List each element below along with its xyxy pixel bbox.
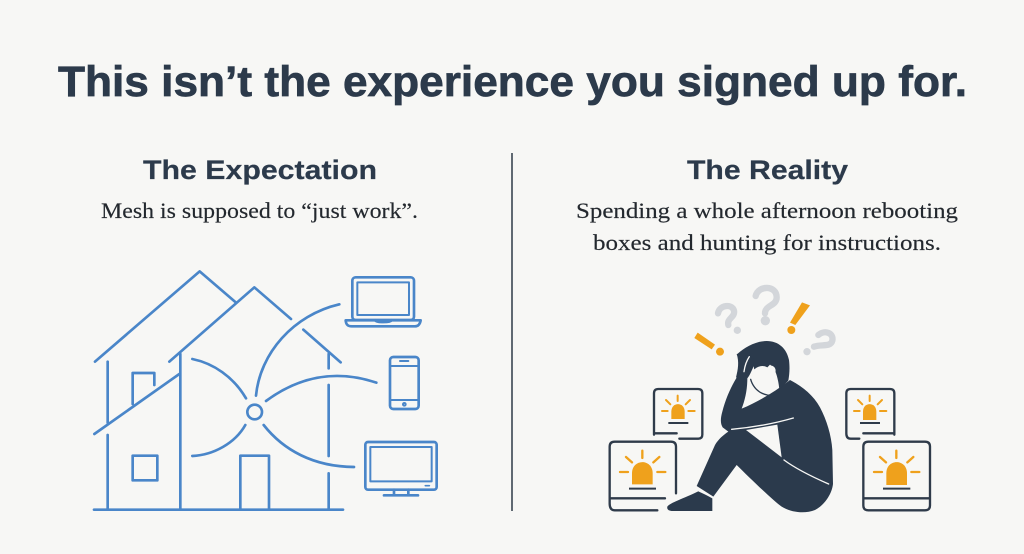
icon: question marks	[718, 288, 833, 355]
shoe	[667, 491, 712, 511]
alert box: back left	[654, 389, 702, 439]
body and legs	[697, 375, 833, 512]
alert box: front right	[863, 442, 930, 510]
heading: the expectation: The Expectation	[143, 155, 377, 185]
text: reality description: Spending a whole afternoon rebooting	[576, 198, 958, 223]
arm and leg highlights	[732, 418, 829, 484]
alert box: front left	[610, 442, 676, 510]
icon: phone	[390, 357, 419, 409]
icon: exclamation marks	[694, 302, 810, 356]
ear	[770, 366, 776, 374]
hand	[736, 353, 754, 380]
text: reality description: boxes and hunting for instructions.	[593, 230, 941, 255]
icon: mesh node with signal curves	[192, 304, 376, 467]
illustration: overwhelmed person with alerts	[610, 288, 930, 512]
icon: laptop	[346, 277, 421, 326]
icon: monitor	[365, 442, 437, 495]
text: expectation description: Mesh is supposed to “just work”.	[101, 198, 418, 223]
icon: house	[94, 271, 343, 510]
figure: person sitting with head in hand	[667, 341, 833, 512]
white wedge between knee and torso	[746, 425, 782, 457]
heading: the reality: The Reality	[687, 155, 848, 185]
center divider	[511, 153, 513, 511]
illustration: mesh house and devices	[94, 271, 437, 510]
title: This isn’t the experience you signed up for.	[58, 58, 967, 106]
alert box: back right	[846, 389, 894, 439]
head and hair	[737, 341, 789, 389]
jaw line	[751, 379, 779, 395]
text: reality description	[576, 198, 958, 255]
